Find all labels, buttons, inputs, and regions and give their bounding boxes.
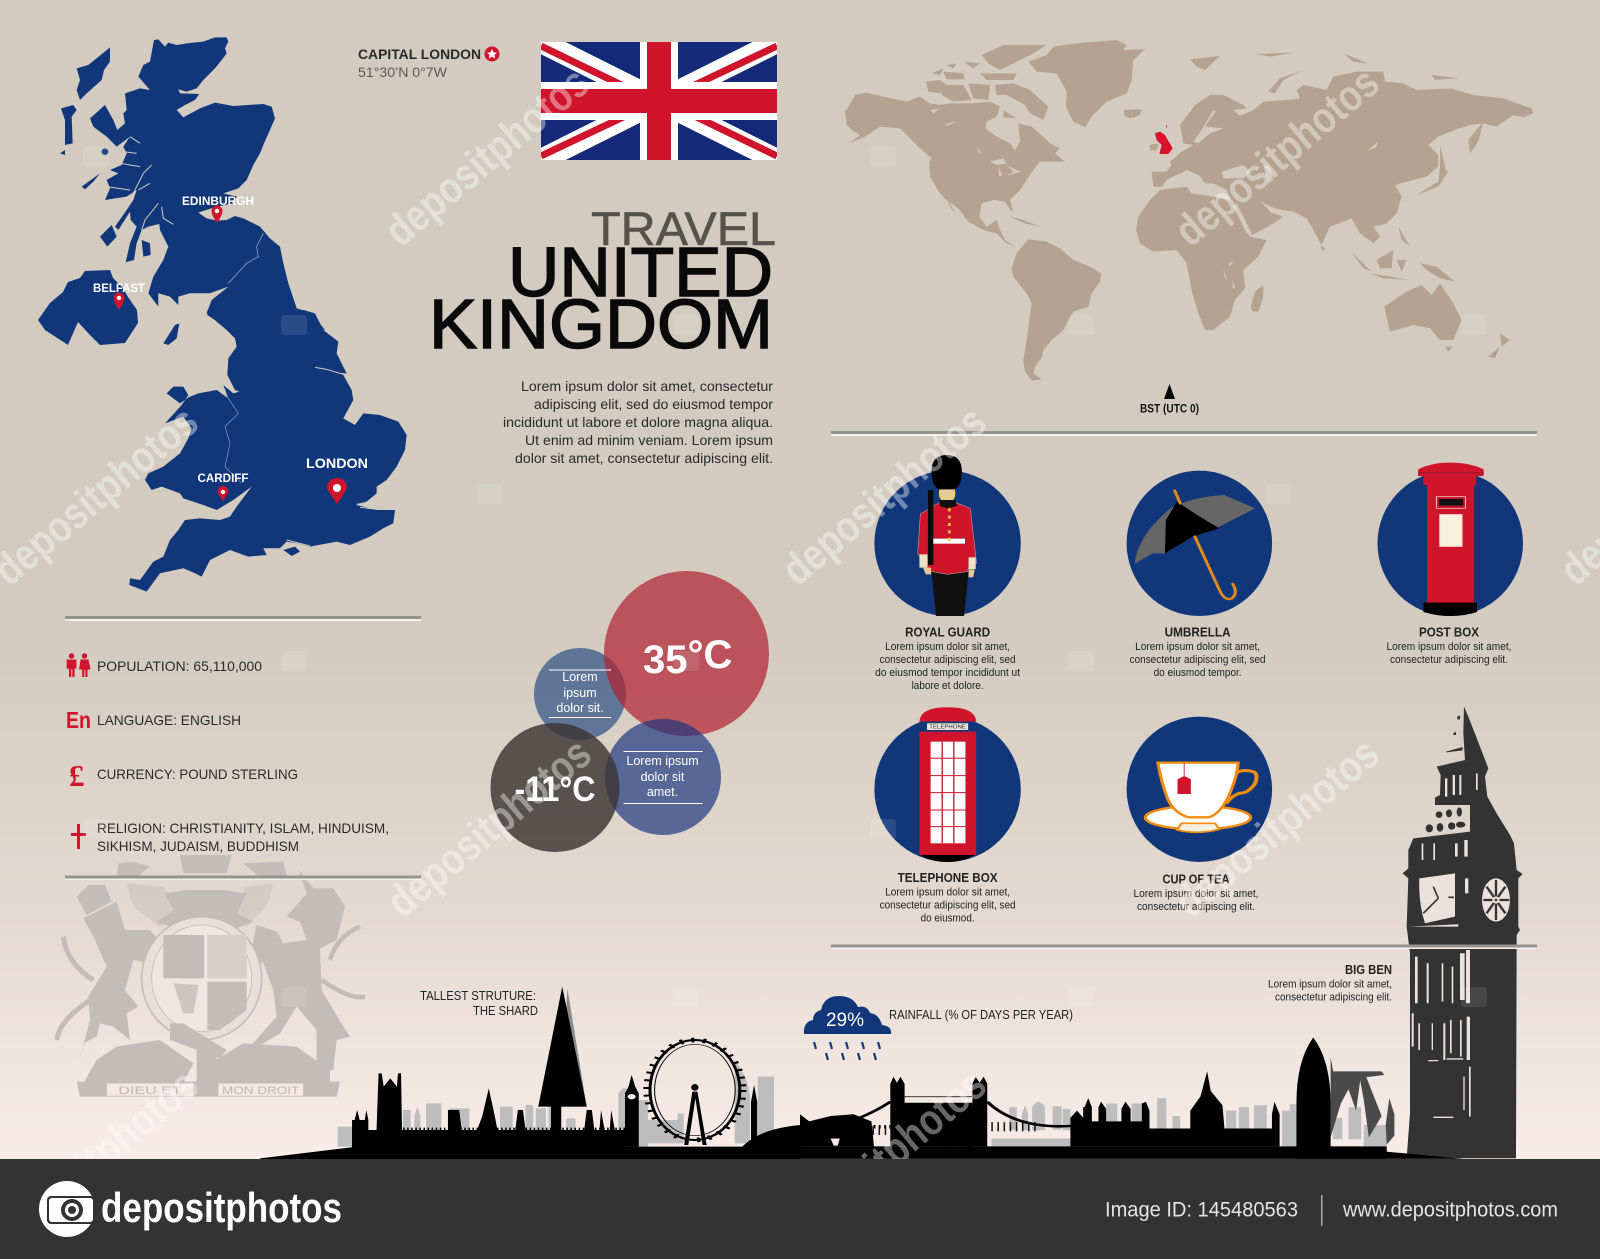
- label: post box: consectetur adipiscing elit.: [1390, 654, 1508, 666]
- Scotland and northern England: [60, 37, 325, 330]
- Northern Ireland: [38, 270, 138, 345]
- watermarks: depositphotos: [376, 58, 599, 256]
- skyline: left: [260, 987, 801, 1159]
- shard label: THE SHARD: [473, 1003, 538, 1018]
- intro text: incididunt ut labore et dolore magna aliqua.: [503, 414, 773, 430]
- capital text: 51°30’N 0°7W: [358, 64, 448, 80]
- icon: language: En: [66, 707, 91, 733]
- coat of arms: MON DROIT: [222, 1085, 299, 1097]
- big ben text: consectetur adipiscing elit.: [1275, 992, 1392, 1004]
- 35 degrees: 35: [643, 638, 688, 682]
- label: Cardiff: [198, 471, 248, 501]
- watermarks: depositphotos: [1166, 729, 1389, 927]
- big ben tower: [1403, 707, 1523, 1158]
- divider: right bottom: [831, 944, 1537, 949]
- label: London: LONDON: [306, 455, 368, 471]
- logo icon: [39, 1181, 96, 1237]
- intro text: Ut enim ad minim veniam. Lorem ipsum: [525, 432, 773, 448]
- image id: Image ID: 145480563: [1105, 1198, 1298, 1222]
- label: telephone box: [880, 871, 1016, 924]
- label: Belfast: BELFAST: [93, 281, 146, 295]
- label: cup of tea: Lorem ipsum dolor sit amet,: [1134, 888, 1258, 900]
- label: Cardiff: CARDIFF: [198, 471, 248, 485]
- England and Wales: [129, 310, 407, 592]
- label: royal guard: ROYAL GUARD: [905, 626, 990, 640]
- language: LANGUAGE: ENGLISH: [97, 712, 241, 728]
- big ben text: BIG BEN: [1345, 963, 1392, 977]
- icon: telephone box: [874, 707, 1021, 862]
- shard label: [420, 988, 538, 1018]
- watermarks: depositphotos: [378, 729, 601, 927]
- rain label: RAINFALL (% OF DAYS PER YEAR): [889, 1007, 1073, 1022]
- temperature bubbles: [490, 571, 769, 852]
- minus 11 degrees: -11°C: [514, 770, 596, 809]
- label: post box: POST BOX: [1419, 626, 1480, 640]
- icon: royal guard: [874, 455, 1021, 616]
- UK map: [38, 37, 407, 592]
- watermark camera marks: [83, 147, 1487, 1007]
- bubble text 1: [549, 670, 611, 718]
- icon: pound: £: [69, 758, 84, 793]
- religion: SIKHISM, JUDAISM, BUDDHISM: [97, 838, 299, 854]
- label: umbrella: do eiusmod tempor.: [1154, 667, 1242, 679]
- title: TRAVEL: [591, 202, 776, 255]
- label: Edinburgh: EDINBURGH: [182, 194, 254, 208]
- bubble text 1: dolor sit.: [556, 701, 604, 715]
- capital text: [358, 46, 500, 80]
- label: post box: [1386, 626, 1512, 666]
- intro text: [503, 378, 773, 466]
- icon: cloud: [804, 996, 891, 1034]
- title: [429, 202, 776, 363]
- bubble text 2: amet.: [647, 785, 678, 799]
- title: KINGDOM: [429, 285, 773, 363]
- population: POPULATION: 65,110,000: [97, 658, 262, 674]
- divider: left bottom: [65, 876, 421, 880]
- religion: [97, 820, 389, 854]
- label: umbrella: consectetur adipiscing elit, sed: [1130, 654, 1266, 666]
- shard label: TALLEST STRUTURE:: [420, 988, 536, 1003]
- world map: [845, 40, 1533, 381]
- icon: people: [67, 653, 90, 677]
- coat of arms: DIEU ET: [118, 1085, 182, 1097]
- label: umbrella: [1130, 626, 1266, 679]
- logo wordmark: depositphotos: [101, 1184, 342, 1231]
- big ben text: [1268, 963, 1392, 1004]
- website: www.depositphotos.com: [1342, 1198, 1558, 1222]
- 35 degrees: °C: [688, 633, 732, 677]
- Americas and Greenland: [845, 40, 1145, 381]
- label: cup of tea: CUP OF TEA: [1162, 872, 1230, 886]
- rain percentage: 29%: [826, 1010, 864, 1031]
- label: royal guard: labore et dolore.: [912, 680, 984, 692]
- watermarks: depositphotos: [773, 1060, 996, 1258]
- icon: cup of tea: [1127, 717, 1272, 862]
- watermarks: depositphotos: [773, 397, 996, 595]
- title: UNITED: [508, 233, 773, 311]
- label: cup of tea: consectetur adipiscing elit.: [1137, 901, 1255, 913]
- label: Belfast: [93, 281, 146, 310]
- label: telephone box: TELEPHONE BOX: [898, 871, 998, 885]
- label: Edinburgh: [182, 194, 254, 223]
- time zone marker: [1140, 384, 1199, 416]
- label: royal guard: Lorem ipsum dolor sit amet,: [885, 641, 1010, 653]
- label: umbrella: UMBRELLA: [1165, 626, 1231, 640]
- label: telephone box: consectetur adipiscing elit, sed: [880, 900, 1016, 912]
- bubble text 1: ipsum: [563, 686, 597, 700]
- footer divider: [1321, 1195, 1322, 1226]
- label: London: [306, 455, 368, 504]
- label: post box: Lorem ipsum dolor sit amet,: [1386, 641, 1512, 653]
- bubble text 1: Lorem: [562, 670, 598, 684]
- watermarks: depositphotos: [1166, 58, 1389, 256]
- icon: umbrella: [1127, 471, 1272, 616]
- skyline: right: [800, 1037, 1463, 1159]
- icon: post box: [1377, 463, 1523, 616]
- bubble text 2: dolor sit: [641, 770, 685, 784]
- icon: telephone box: TELEPHONE: [929, 724, 966, 730]
- facts: [66, 653, 389, 854]
- icon: rain: [814, 1042, 880, 1060]
- footer bar: [0, 1159, 1600, 1259]
- icon: cross: [71, 824, 86, 849]
- capital text: CAPITAL LONDON: [358, 46, 481, 62]
- label: telephone box: Lorem ipsum dolor sit amet,: [885, 886, 1010, 898]
- label: cup of tea: [1134, 872, 1258, 913]
- intro text: adipiscing elit, sed do eiusmod tempor: [534, 396, 773, 412]
- flag: [541, 42, 777, 160]
- bubble text 2: [624, 751, 702, 804]
- UK highlight: [1155, 126, 1173, 154]
- religion: RELIGION: CHRISTIANITY, ISLAM, HINDUISM,: [97, 820, 389, 836]
- label: telephone box: do eiusmod.: [921, 912, 975, 924]
- label: royal guard: [875, 626, 1020, 692]
- intro text: Lorem ipsum dolor sit amet, consectetur: [521, 378, 773, 394]
- label: royal guard: consectetur adipiscing elit, sed: [880, 654, 1016, 666]
- Eurasia, Africa and Oceania: [1130, 49, 1533, 358]
- label: royal guard: do eiusmod tempor incididunt ut: [875, 667, 1020, 679]
- big ben text: Lorem ipsum dolor sit amet,: [1268, 978, 1392, 990]
- divider: right top: [831, 431, 1537, 436]
- rainfall: [804, 996, 1073, 1060]
- currency: CURRENCY: POUND STERLING: [97, 766, 298, 782]
- bubble text 2: Lorem ipsum: [626, 754, 699, 768]
- coat of arms: [57, 855, 365, 1097]
- label: umbrella: Lorem ipsum dolor sit amet,: [1135, 641, 1260, 653]
- intro text: dolor sit amet, consectetur adipiscing elit.: [515, 450, 773, 466]
- time zone marker: BST (UTC 0): [1140, 402, 1199, 416]
- divider: left top: [65, 616, 421, 621]
